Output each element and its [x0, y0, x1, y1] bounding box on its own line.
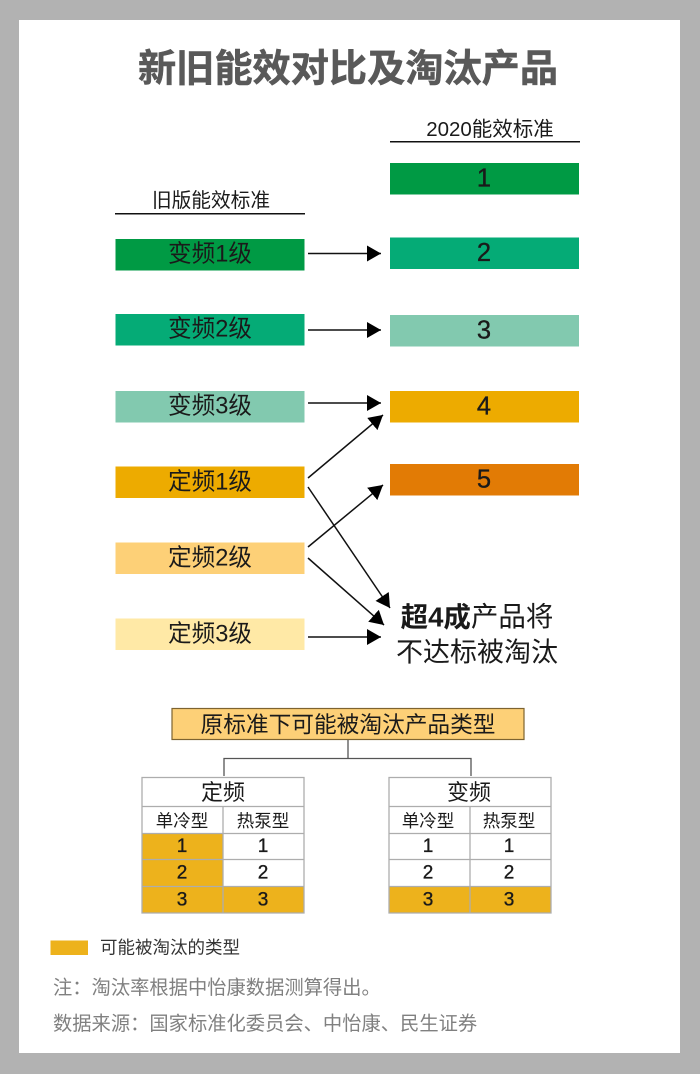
arrow: fixed 1 to level 4 — [308, 415, 383, 478]
bar: fixed level 3 — [116, 618, 304, 650]
table: fixed frequency: 2 — [177, 862, 187, 884]
table: inverter: 单冷型 — [402, 811, 454, 831]
table: inverter: 2 — [504, 862, 514, 884]
table: fixed frequency: 定频 — [201, 780, 245, 805]
bar: fixed level 1 — [116, 466, 304, 498]
bar: fixed level 2: 定频2级 — [168, 544, 252, 572]
table: inverter: 3 — [423, 890, 433, 910]
table: fixed frequency: 3 — [177, 890, 187, 910]
table: inverter — [389, 778, 551, 913]
bar: inverter level 1 — [116, 239, 304, 270]
bar: new level 1: 1 — [477, 164, 491, 192]
bar: inverter level 2 — [116, 314, 304, 346]
table: inverter: 1 — [423, 836, 433, 857]
table: fixed frequency: 1 — [258, 836, 268, 857]
box: eliminated product types heading: 原标准下可能被淘汰产品类型 — [201, 712, 495, 738]
new level bars — [390, 163, 579, 496]
table: fixed frequency — [142, 778, 304, 913]
bar: new level 5 — [390, 464, 579, 496]
table: fixed frequency: 热泵型 — [237, 811, 289, 831]
bar: inverter level 1: 变频1级 — [168, 240, 252, 268]
legend: 可能被淘汰的类型 — [100, 938, 240, 958]
callout: over 40% eliminated: 超4成产品将 — [401, 601, 553, 632]
arrow: fixed 1 to eliminated — [308, 487, 390, 608]
table: inverter: 变频 — [447, 780, 491, 805]
source: 数据来源：国家标准化委员会、中怡康、民生证券 — [53, 1013, 477, 1035]
heading: 2020 standard: 2020能效标准 — [426, 118, 554, 141]
bar: inverter level 2: 变频2级 — [168, 316, 252, 342]
table: fixed frequency: 单冷型 — [156, 811, 208, 831]
bar: fixed level 3: 定频3级 — [168, 620, 252, 648]
heading: old standard: 旧版能效标准 — [152, 190, 270, 212]
table: inverter: 3 — [504, 890, 514, 910]
note: 注：淘汰率根据中怡康数据测算得出。 — [53, 977, 381, 999]
table: inverter: 1 — [504, 836, 514, 857]
callout: over 40% eliminated: 不达标被淘汰 — [396, 638, 558, 668]
title: 新旧能效对比及淘汰产品 — [138, 48, 558, 90]
bar: new level 2: 2 — [477, 239, 491, 267]
table: fixed frequency: 2 — [258, 862, 268, 884]
arrow: inverter 3 to level 4 — [308, 402, 381, 404]
bar: inverter level 3: 变频3级 — [168, 392, 252, 420]
bar: new level 4 — [390, 391, 579, 422]
bar: inverter level 3 — [116, 391, 304, 422]
bar: new level 1 — [390, 163, 579, 194]
bar: new level 3 — [390, 315, 579, 346]
bar: new level 3: 3 — [477, 316, 491, 344]
table: fixed frequency: 1 — [177, 836, 187, 857]
arrow: inverter 2 to level 3 — [308, 329, 381, 331]
bar: fixed level 1: 定频1级 — [168, 468, 252, 496]
bar: new level 5: 5 — [477, 466, 491, 494]
table: fixed frequency: 3 — [258, 890, 268, 910]
arrow: inverter 1 to level 2 — [308, 252, 381, 254]
arrow: fixed 3 to eliminated — [308, 636, 381, 638]
callout: over 40% eliminated — [396, 601, 558, 668]
arrow: fixed 2 to eliminated — [308, 558, 384, 625]
tree connector — [224, 740, 471, 776]
table: inverter: 2 — [423, 862, 433, 884]
table: inverter: 热泵型 — [483, 811, 535, 831]
bar: new level 2 — [390, 238, 579, 269]
old level bars — [116, 239, 304, 650]
bar: new level 4: 4 — [477, 392, 491, 420]
arrows — [308, 254, 390, 637]
bar: fixed level 2 — [116, 542, 304, 574]
arrow: fixed 2 to level 5 — [308, 485, 383, 547]
